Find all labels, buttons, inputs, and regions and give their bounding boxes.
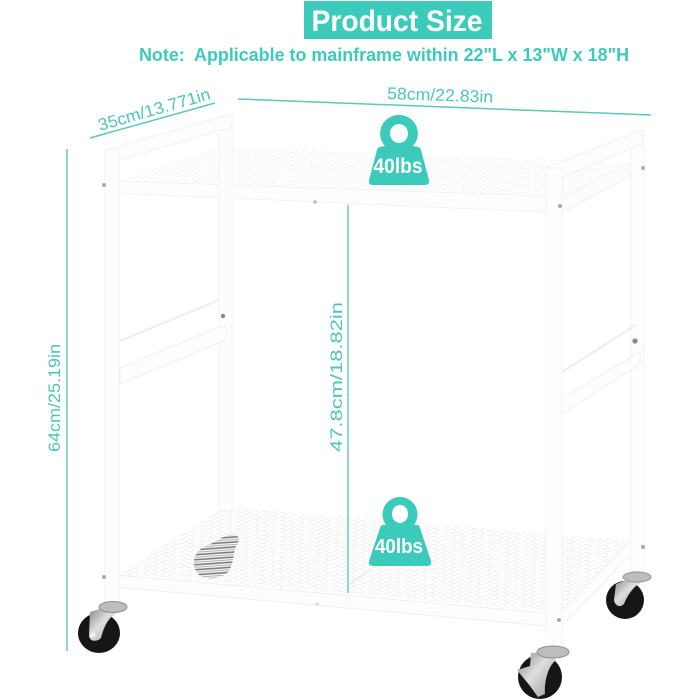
caster: back right — [606, 572, 651, 619]
left handle — [105, 114, 232, 172]
back right post — [631, 131, 644, 571]
title banner: Product Size — [312, 5, 482, 38]
dimension: length — [238, 84, 651, 115]
dimension: length: 58cm/22.83in — [387, 84, 493, 107]
note text: Note: Applicable to mainframe within 22"L x 13"W x 18"H — [139, 45, 629, 65]
icon: bottom shelf weight — [369, 497, 431, 566]
front left post — [105, 150, 119, 602]
reflected mesh patch — [194, 535, 239, 578]
back left post — [219, 116, 232, 511]
dimension: depth: 35cm/13.771in — [96, 85, 213, 135]
icon: top shelf weight: 40lbs — [374, 155, 422, 178]
front right post — [546, 168, 562, 650]
caster: front left — [78, 602, 127, 653]
dimension: total height: 64cm/25.19in — [45, 344, 64, 452]
cart illustration — [78, 114, 651, 699]
bottom shelf — [116, 507, 632, 627]
icon: bottom shelf weight: 40lbs — [375, 536, 423, 558]
frame bolts — [102, 166, 645, 622]
icon: top shelf weight — [369, 115, 429, 185]
left side rail — [120, 300, 226, 384]
right side rail — [562, 325, 640, 414]
dimension: shelf clearance: 47.8cm/18.82in — [327, 302, 346, 452]
right handle — [546, 130, 642, 186]
top shelf — [116, 146, 632, 213]
caster: front right — [517, 646, 569, 699]
